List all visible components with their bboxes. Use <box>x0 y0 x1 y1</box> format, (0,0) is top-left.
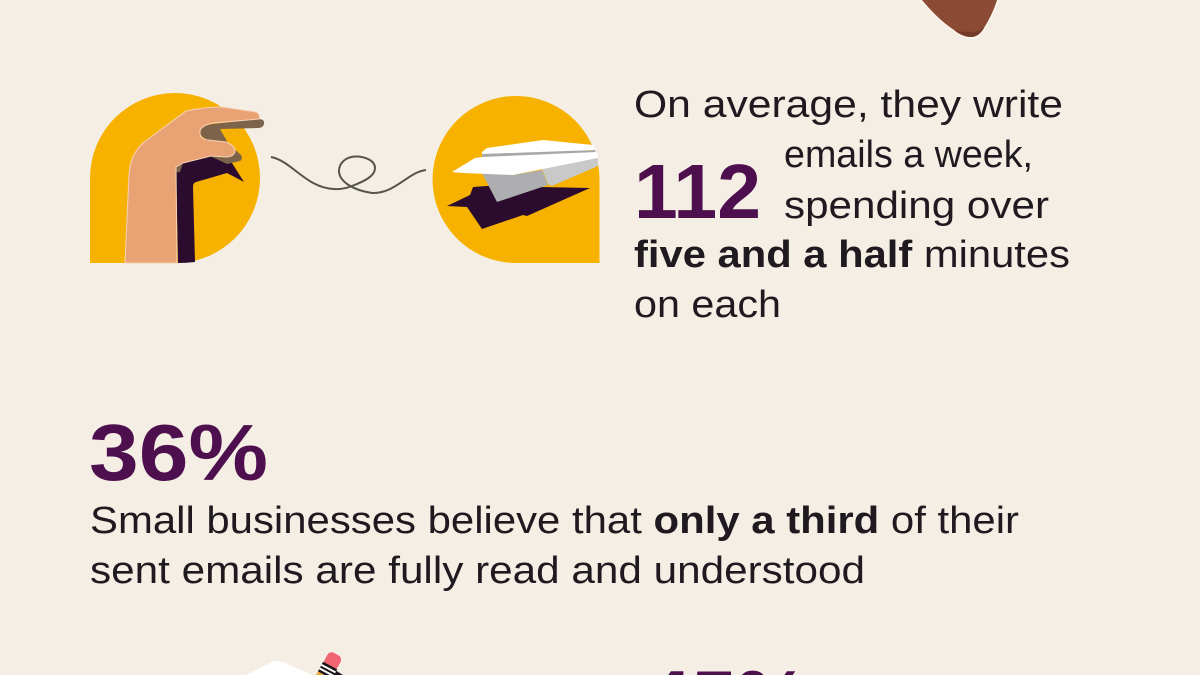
text block: weekly email average: on each <box>634 284 781 326</box>
arrow: looping flight path <box>271 156 426 193</box>
icon: paper plane <box>433 96 600 263</box>
text block: emails read and understood: sent emails are fully read and understood <box>90 550 865 592</box>
icon: hand flicking <box>90 93 264 263</box>
icon: envelope and pencil <box>246 650 343 675</box>
text block: weekly email average: emails a week, <box>784 134 1033 176</box>
stat: 112: 112 <box>634 149 761 235</box>
text block: emails read and understood: Small businesses believe that only a third of their <box>90 500 1019 542</box>
text block: weekly email average: five and a half minutes <box>634 234 1070 276</box>
text block: weekly email average: spending over <box>784 185 1049 227</box>
text block: weekly email average <box>634 84 1070 326</box>
illustration: brown shape at top edge <box>920 0 999 39</box>
stat: 36%: 36% <box>89 408 268 497</box>
text block: weekly email average: On average, they write <box>634 84 1063 126</box>
text block: emails read and understood <box>90 500 1019 592</box>
